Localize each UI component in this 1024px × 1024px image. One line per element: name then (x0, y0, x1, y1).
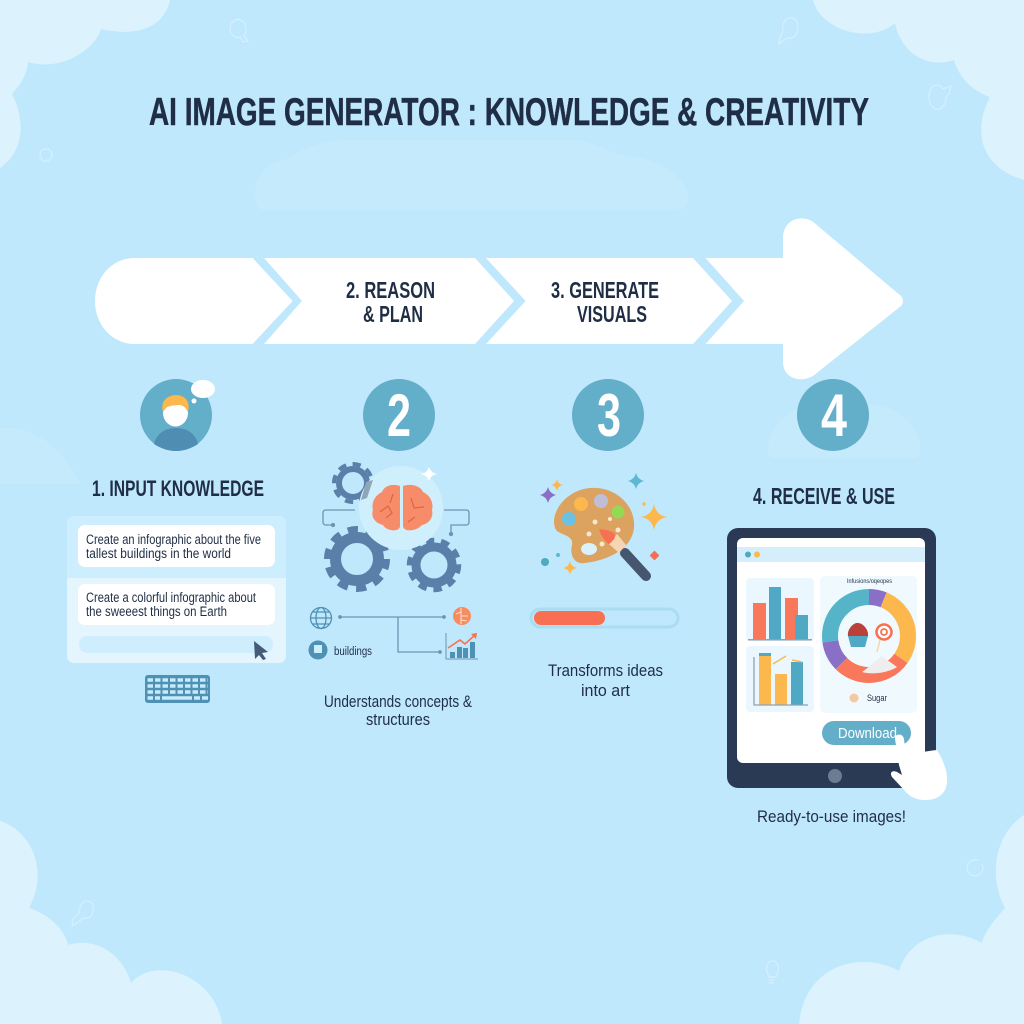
panel: prompt input (67, 516, 286, 663)
connector lines around brain (323, 510, 469, 536)
chart: sweets donut (820, 576, 917, 713)
heading: input knowledge: 1. INPUT KNOWLEDGE (92, 476, 264, 501)
step 2 column (308, 379, 478, 729)
icon: gears (328, 464, 458, 590)
arrow segment 2 (264, 258, 514, 344)
icon: sugar pile (862, 656, 897, 673)
background: faint clouds (0, 140, 920, 484)
icon: lollipop (876, 624, 892, 652)
icon: brain (359, 466, 443, 550)
caption: step 3: into art (581, 681, 630, 700)
arrow segment 3 (486, 258, 732, 344)
knowledge network diagram (308, 607, 478, 660)
chart: sweets donut: Infusions/oqeopes (847, 579, 892, 585)
icon: pointing hand (891, 734, 947, 800)
prompt bubble 2: the sweeest things on Earth (86, 604, 227, 619)
caption: step 4: Ready-to-use images! (757, 807, 906, 826)
arrow segment 3: 3. GENERATE (551, 277, 659, 303)
network lines (339, 616, 445, 653)
caption: step 3 (548, 661, 663, 700)
number badge 2: 2 (387, 382, 411, 449)
icon: sparkles (540, 473, 667, 575)
chart: buildings bars (746, 578, 814, 641)
caption: step 3: Transforms ideas (548, 661, 663, 680)
number badge 4 (797, 379, 869, 451)
number badge 3: 3 (597, 382, 621, 449)
icon: person with thought bubble (140, 379, 215, 451)
top gear (334, 464, 372, 502)
label: buildings: buildings (334, 646, 372, 658)
arrow segment 2: 2. REASON (346, 277, 435, 303)
icon: small brain ball (453, 607, 471, 625)
arrow segment 2: & PLAN (363, 301, 423, 327)
heading: receive and use: 4. RECEIVE & USE (753, 483, 895, 509)
icon: cupcake (848, 623, 868, 647)
download button (822, 721, 911, 745)
prompt bubble 1: tallest buildings in the world (86, 546, 231, 561)
label: sugar: Sugar (867, 693, 887, 703)
prompt bubble 1: Create an infographic about the five (86, 532, 261, 547)
icon: keyboard (145, 675, 210, 703)
process arrow (95, 218, 903, 379)
input bar (79, 636, 273, 653)
number badge 3 (572, 379, 644, 451)
icon: sugar mascot (850, 694, 858, 702)
arrow segment 3: VISUALS (577, 301, 647, 327)
download button: Download (838, 725, 897, 742)
number badge 2 (363, 379, 435, 451)
chart: yellow bars (746, 646, 814, 712)
caption: step 2: structures (366, 710, 430, 729)
icon: growth chart (446, 633, 478, 659)
icon: tablet (727, 528, 936, 788)
icon: buildings badge (308, 640, 328, 660)
icon: paint palette and brush (554, 488, 646, 576)
right gear (410, 540, 458, 590)
prompt bubble 2 (78, 584, 275, 625)
arrow segment 1 (95, 258, 293, 344)
icon: mouse cursor (254, 641, 268, 660)
icon: globe (310, 608, 332, 628)
number badge 4: 4 (821, 382, 847, 449)
prompt bubble 2: Create a colorful infographic about (86, 590, 256, 605)
caption: step 2: Understands concepts & (324, 692, 473, 711)
arrow head segment 4 (706, 218, 903, 379)
step 1 column (67, 379, 286, 703)
large gear (328, 530, 386, 588)
step 3 column (531, 379, 678, 700)
tablet home button (828, 769, 842, 783)
tablet top bar (737, 547, 925, 562)
progress bar (531, 609, 678, 627)
caption: step 2 (324, 692, 473, 729)
prompt bubble 1 (78, 525, 275, 567)
step 4 column (727, 379, 947, 826)
